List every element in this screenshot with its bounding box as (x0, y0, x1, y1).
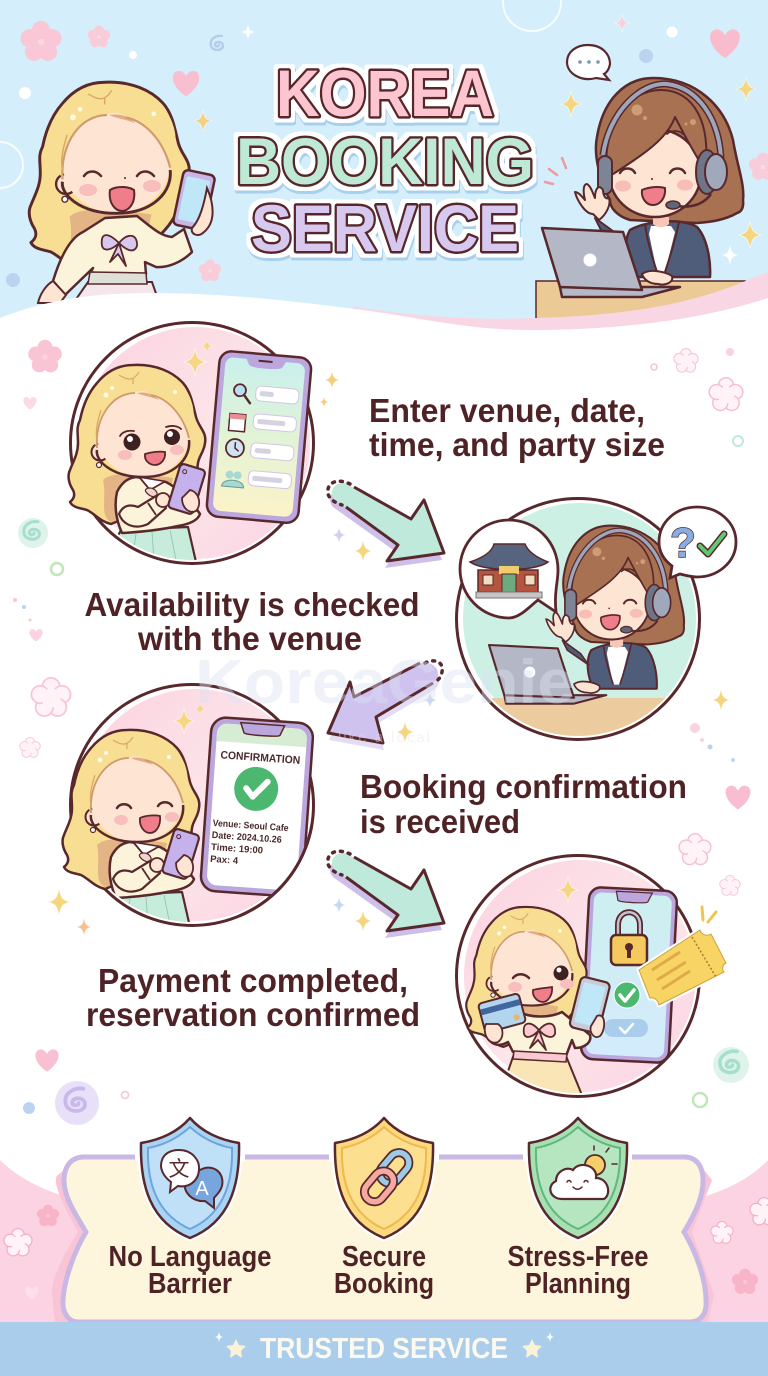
desk (536, 281, 745, 340)
bank card (478, 993, 526, 1033)
confirmation phone (200, 716, 314, 918)
benefit labels: Barrier (148, 1268, 232, 1300)
step 4 illustration (456, 856, 726, 1100)
pink wave band (353, 272, 768, 340)
title: KOREA (276, 56, 494, 130)
benefit labels: Booking (334, 1268, 434, 1300)
bubble: question and check (659, 507, 736, 578)
confirmation phone: Date: 2024.10.26 (211, 830, 282, 846)
padlock (611, 912, 647, 965)
title (236, 56, 534, 265)
shield: no language barrier: 文 (168, 1153, 190, 1183)
bubble: venue (460, 520, 558, 618)
watermark: KoreaGenie (195, 648, 575, 717)
step 3 label: is received (360, 803, 520, 840)
step 2 illustration (450, 498, 736, 748)
golden ticket (639, 930, 726, 1005)
handheld phone (569, 976, 611, 1034)
speech bubble (567, 45, 610, 80)
shield: no language barrier: A (195, 1178, 209, 1200)
arrow 3 (328, 851, 444, 938)
arrow 2 (328, 661, 442, 750)
confirmation phone: Time: 19:00 (211, 842, 263, 857)
header decorations (0, 0, 768, 287)
footer bar (0, 1322, 768, 1376)
benefit labels: Stress-Free (508, 1241, 648, 1273)
agent character (542, 78, 743, 297)
confirmation phone: CONFIRMATION (220, 749, 301, 767)
confirmation phone: Venue: Seoul Cafe (212, 818, 289, 834)
arrow 1 (328, 481, 444, 568)
step 3 illustration (63, 684, 314, 927)
step 4 label: reservation confirmed (86, 996, 420, 1033)
step 4 label: Payment completed, (98, 962, 408, 999)
title: SERVICE (251, 191, 519, 265)
sparkles by arrow 3 (332, 897, 372, 932)
watermark: like a local (338, 729, 432, 746)
confirmation phone: Pax: 4 (210, 854, 239, 867)
sparkles by arrow 2 (396, 692, 437, 743)
step 1 illustration (69, 322, 314, 564)
watermark (195, 648, 575, 746)
step 1 label: Enter venue, date, (369, 392, 645, 429)
step 4 label (86, 962, 420, 1033)
step 1 label: time, and party size (369, 426, 665, 463)
benefit labels (108, 1241, 648, 1300)
benefit labels: Secure (342, 1241, 426, 1273)
blonde girl with phone (29, 82, 215, 305)
step 1 label (369, 392, 665, 463)
shield: stress-free planning (529, 1118, 627, 1238)
benefit labels: No Language (108, 1241, 272, 1273)
title: BOOKING (236, 124, 534, 198)
body decorations (13, 340, 750, 1125)
step 2 label (84, 586, 420, 657)
step 2 label: with the venue (137, 620, 362, 657)
benefits panel (52, 1151, 714, 1322)
footer bar: TRUSTED SERVICE (260, 1333, 508, 1365)
step 3 label: Booking confirmation (360, 768, 687, 805)
sparkles by arrow 1 (332, 527, 372, 562)
step 2 label: Availability is checked (84, 586, 420, 623)
header background (0, 0, 768, 340)
phone with form (206, 350, 312, 524)
step 3 label (360, 768, 687, 840)
benefit labels: Planning (525, 1268, 631, 1300)
bottom pink background (0, 1160, 768, 1330)
shield: no language barrier (141, 1118, 239, 1238)
bottom flowers (4, 1198, 768, 1300)
shield: secure booking (335, 1118, 433, 1238)
white content area (0, 293, 768, 1376)
bubble: question and check: ? (670, 519, 696, 566)
